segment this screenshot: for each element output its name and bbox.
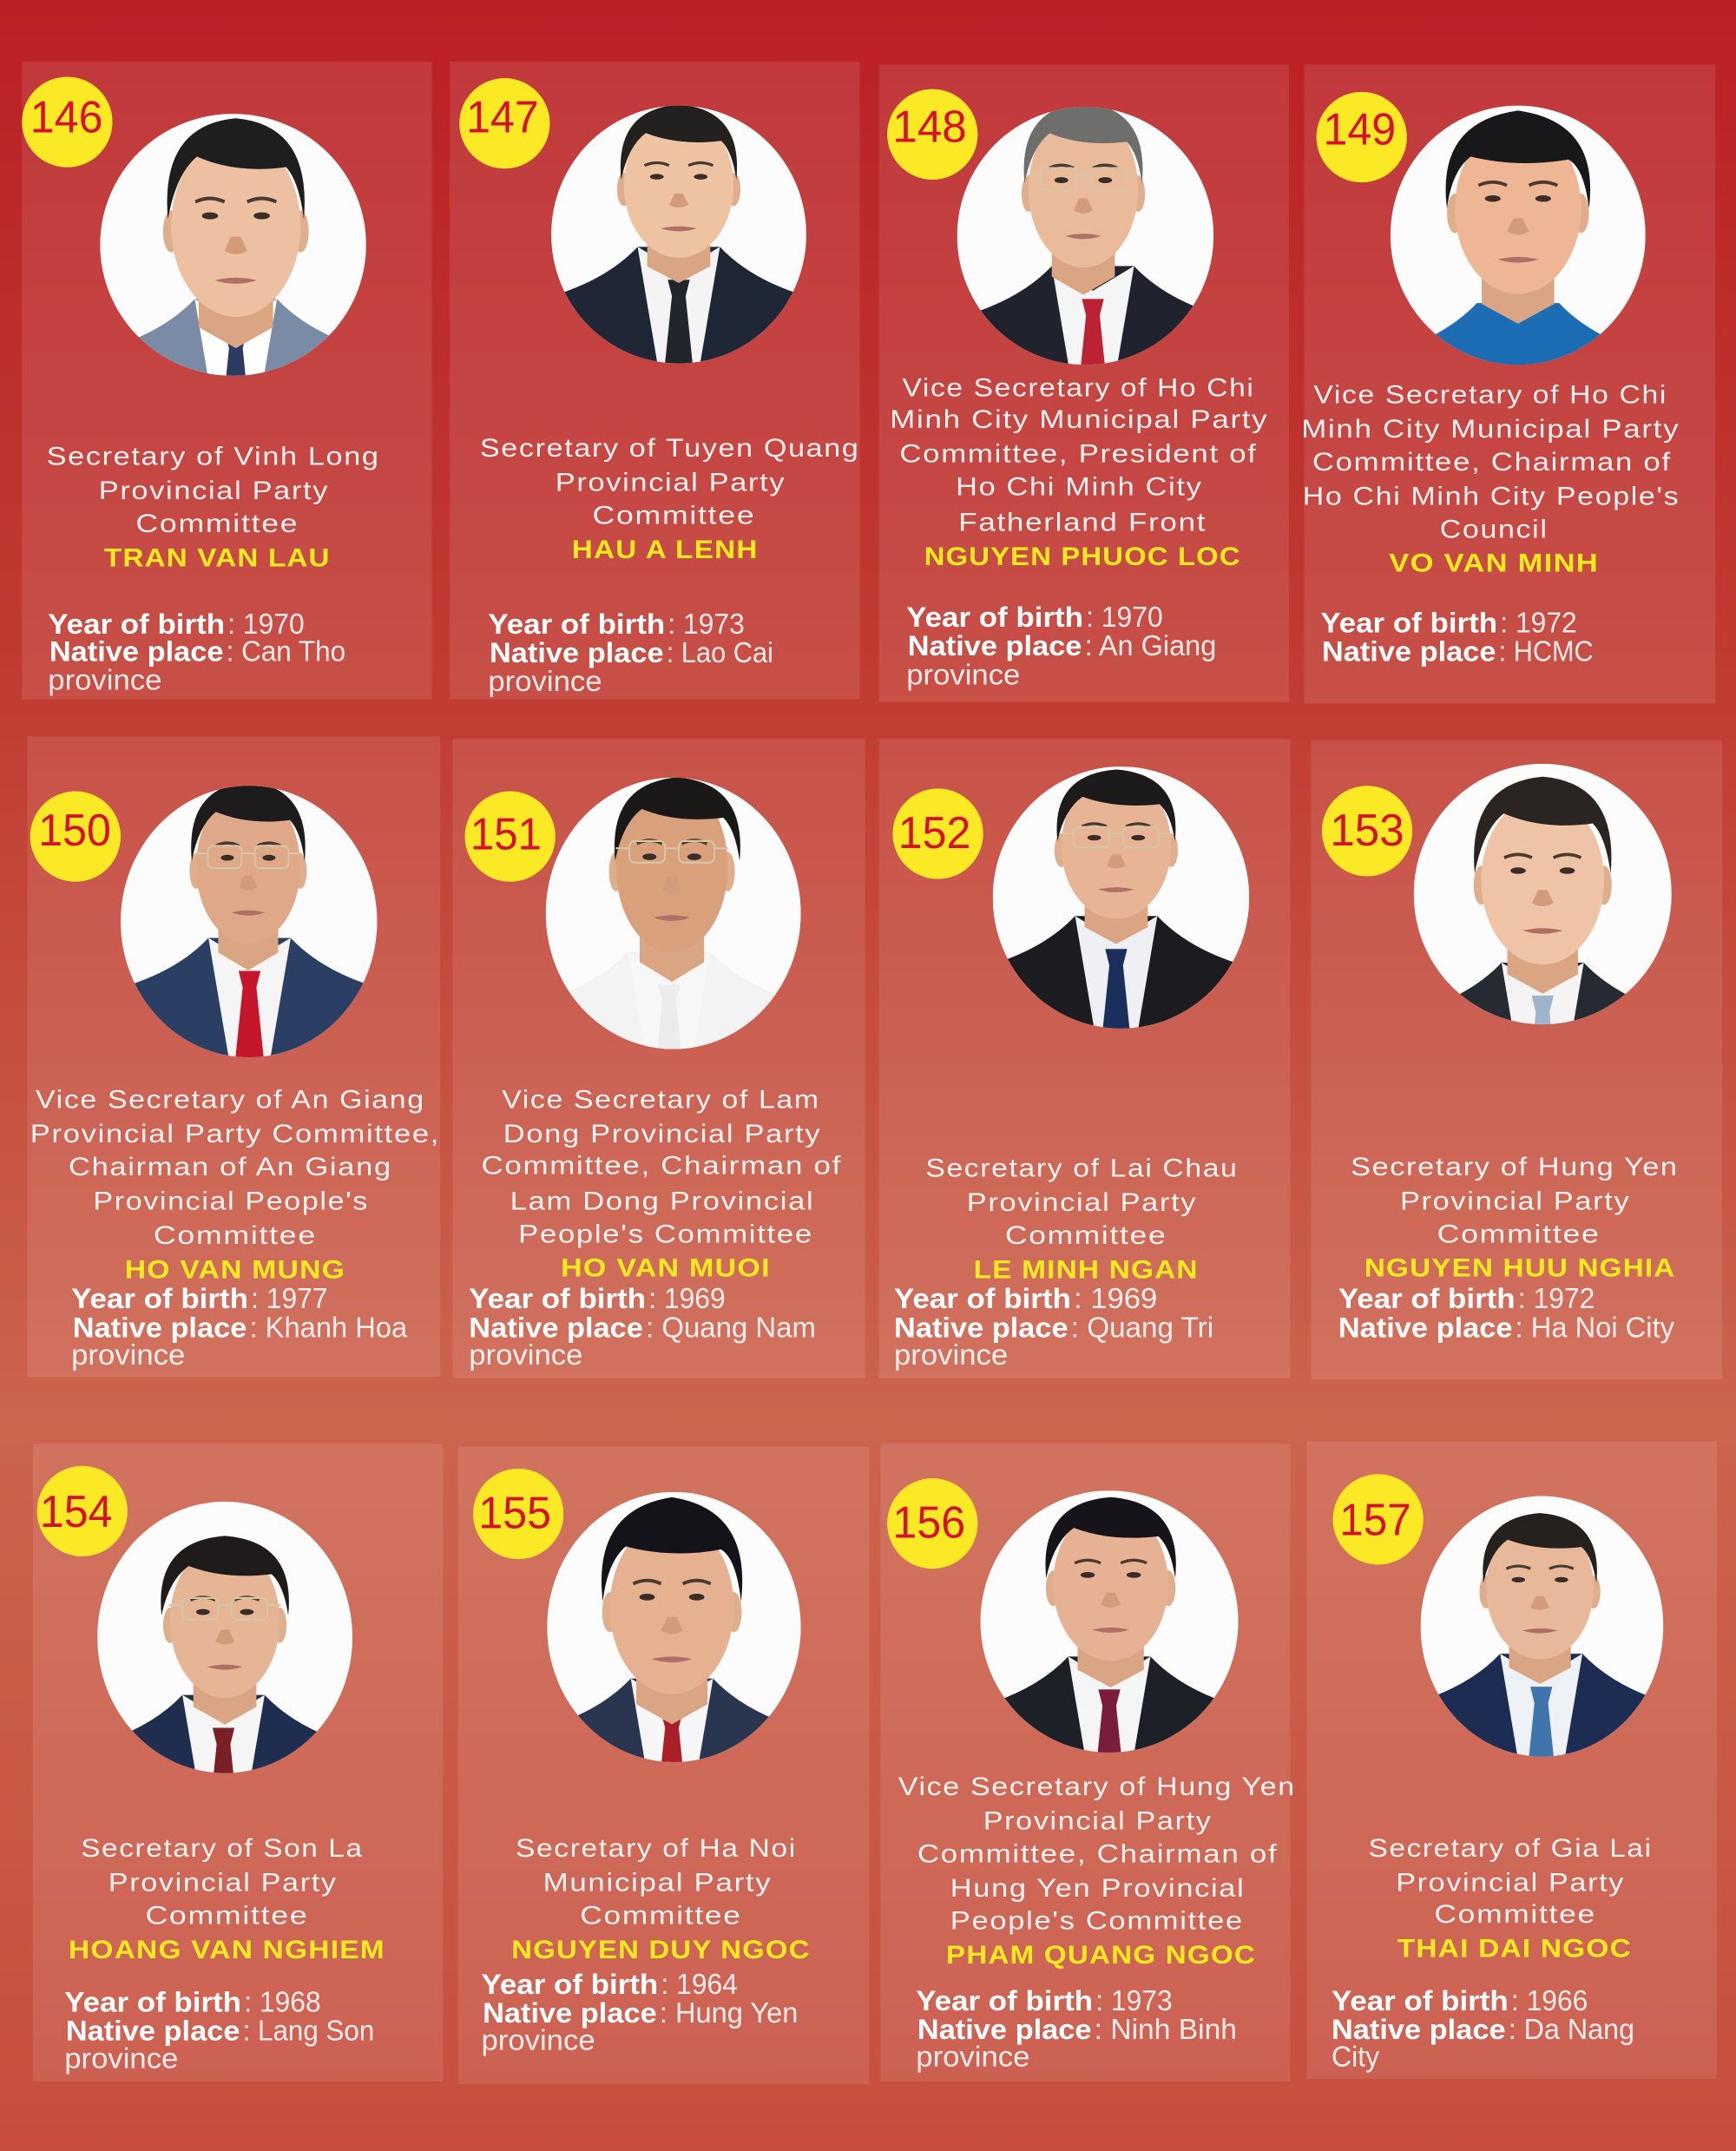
details: Native place [483, 1997, 657, 2029]
number badge: 150 [38, 806, 111, 856]
portrait [981, 1490, 1238, 1753]
details [894, 1283, 1213, 1372]
card 155: Nguyen Duy Ngoc [458, 1447, 870, 2084]
position [47, 444, 380, 538]
card 154: Hoang Van Nghiem [33, 1444, 443, 2082]
details: : 1964 [661, 1969, 738, 2001]
position: Hung Yen Provincial [950, 1875, 1245, 1903]
number badge [892, 788, 983, 879]
panel [880, 1444, 1291, 2082]
number badge [22, 76, 113, 168]
name: NGUYEN PHUOC LOC [924, 543, 1241, 571]
details: : Lang Son [243, 2016, 374, 2048]
details: Year of birth [48, 608, 225, 640]
portrait [121, 786, 377, 1057]
panel [450, 62, 860, 700]
details: : 1972 [1500, 607, 1577, 639]
position: Provincial People's [93, 1187, 369, 1215]
name: HAU A LENH [572, 536, 759, 564]
name: VO VAN MINH [1389, 549, 1599, 578]
details: : Khanh Hoa [250, 1312, 408, 1344]
card 157: Thai Dai Ngoc [1307, 1441, 1720, 2079]
position [890, 375, 1268, 536]
position: Minh City Municipal Party [1301, 416, 1680, 444]
position: Committee [145, 1902, 308, 1930]
number badge [887, 1478, 977, 1569]
position: Provincial Party [983, 1807, 1213, 1835]
details: Year of birth [64, 1986, 241, 2017]
name: TRAN VAN LAU [104, 543, 331, 572]
position: Secretary of Hung Yen [1351, 1154, 1679, 1181]
portrait [993, 766, 1250, 1029]
number badge [465, 792, 556, 882]
details: province [488, 666, 602, 698]
position: People's Committee [518, 1220, 813, 1248]
details [64, 1986, 374, 2075]
details: Year of birth [482, 1969, 658, 2000]
portrait [551, 106, 806, 364]
position [925, 1154, 1239, 1250]
details: province [64, 2042, 178, 2075]
position [81, 1835, 364, 1930]
details: Native place [66, 2016, 240, 2047]
position: Vice Secretary of An Giang [36, 1086, 425, 1114]
name: PHAM QUANG NGOC [946, 1941, 1256, 1970]
card 151: Ho Van Muoi [452, 739, 865, 1378]
details: : Da Nang [1509, 2014, 1634, 2046]
details: province [71, 1339, 185, 1372]
details: Native place [894, 1312, 1069, 1343]
details: : Lao Cai [667, 637, 773, 669]
position [1369, 1835, 1653, 1929]
portrait [1420, 1496, 1663, 1757]
position: Provincial Party [967, 1189, 1197, 1217]
position: Ho Chi Minh City [956, 473, 1202, 501]
position: Secretary of Vinh Long [47, 444, 380, 471]
number badge [37, 1466, 128, 1556]
details: : 1969 [648, 1283, 726, 1315]
details: : Quang Nam [646, 1312, 816, 1344]
number badge [459, 78, 549, 168]
position: Provincial Party [1400, 1187, 1630, 1215]
details: province [48, 665, 161, 697]
position [1351, 1154, 1679, 1248]
card 156: Pham Quang Ngoc [880, 1444, 1296, 2082]
position: Committee [1437, 1220, 1601, 1248]
details: Year of birth [469, 1283, 646, 1314]
position: Municipal Party [543, 1869, 772, 1897]
portrait [957, 107, 1213, 365]
number badge: 146 [30, 92, 102, 142]
number badge: 147 [466, 92, 539, 142]
position [898, 1773, 1296, 1936]
position: Vice Secretary of Ho Chi [902, 375, 1254, 403]
name: NGUYEN HUU NGHIA [1364, 1254, 1675, 1283]
details: Year of birth [916, 1985, 1093, 2016]
position: Chairman of An Giang [69, 1154, 392, 1181]
position: Secretary of Gia Lai [1369, 1835, 1653, 1863]
details: province [894, 1339, 1008, 1372]
panel [452, 739, 865, 1378]
panel [1311, 740, 1722, 1379]
number badge: 155 [478, 1489, 551, 1539]
details [482, 1969, 798, 2057]
position: Ho Chi Minh City People's [1303, 483, 1680, 510]
card 146: Tran Van Lau [22, 62, 432, 700]
name: HOANG VAN NGHIEM [69, 1936, 385, 1964]
position: Committee [580, 1902, 742, 1930]
portrait [545, 778, 800, 1049]
details: Year of birth [1332, 1985, 1509, 2016]
number badge: 149 [1323, 105, 1396, 155]
details: : An Giang [1085, 630, 1216, 662]
panel [1307, 1441, 1717, 2079]
details: province [469, 1339, 582, 1372]
details: Year of birth [1338, 1283, 1516, 1314]
position: People's Committee [950, 1908, 1244, 1936]
details: province [916, 2042, 1029, 2074]
position: Lam Dong Provincial [510, 1187, 814, 1215]
name: NGUYEN DUY NGOC [511, 1936, 811, 1964]
panel [28, 736, 440, 1377]
portrait [1391, 106, 1646, 365]
position [1301, 381, 1680, 543]
details: : Hung Yen [660, 1997, 798, 2029]
panel [879, 739, 1291, 1378]
details [48, 608, 345, 697]
portrait [100, 114, 366, 376]
card 148: Nguyen Phuoc Loc [879, 64, 1289, 702]
position: Provincial Party [1396, 1869, 1625, 1897]
details: : Ninh Binh [1095, 2014, 1237, 2046]
position: Secretary of Tuyen Quang [480, 435, 860, 463]
details: : 1973 [1095, 1985, 1173, 2017]
position: Committee, President of [899, 440, 1258, 468]
number badge: 154 [40, 1487, 113, 1537]
position: Committee [154, 1222, 317, 1250]
number badge [887, 89, 977, 180]
position: Dong Provincial Party [503, 1121, 821, 1148]
details: : 1970 [227, 608, 305, 641]
position: Vice Secretary of Hung Yen [898, 1773, 1296, 1801]
position: Committee [592, 502, 755, 530]
number badge: 151 [470, 810, 542, 860]
position [516, 1835, 797, 1930]
details: province [482, 2025, 595, 2057]
panel [22, 62, 432, 700]
details [488, 608, 773, 698]
position: Vice Secretary of Ho Chi [1313, 381, 1667, 409]
details [1332, 1985, 1634, 2074]
details [1320, 607, 1594, 668]
number badge [30, 792, 121, 882]
details: : Ha Noi City [1516, 1312, 1674, 1344]
details [906, 602, 1216, 691]
details: Native place [1322, 635, 1496, 667]
number badge [1322, 786, 1412, 876]
position: Fatherland Front [958, 509, 1207, 536]
details: Native place [917, 2014, 1092, 2045]
name: THAI DAI NGOC [1397, 1934, 1632, 1963]
details: : 1968 [244, 1986, 321, 2018]
details: Year of birth [894, 1283, 1071, 1314]
position: Committee [135, 510, 299, 538]
position: Committee, Chairman of [1312, 449, 1672, 477]
details: Native place [1332, 2014, 1506, 2045]
position: Provincial Party [556, 470, 786, 497]
name: LE MINH NGAN [974, 1255, 1199, 1284]
position: Minh City Municipal Party [890, 406, 1268, 434]
position [480, 435, 860, 530]
panel [458, 1447, 870, 2084]
position: Council [1440, 516, 1549, 543]
details [71, 1283, 408, 1372]
card 150: Ho Van Mung [28, 736, 440, 1377]
card 149: Vo Van Minh [1301, 64, 1715, 703]
portrait [1413, 764, 1672, 1024]
card 153: Nguyen Huu Nghia [1311, 740, 1722, 1379]
card 152: Le Minh Ngan [879, 739, 1294, 1378]
position: Committee [1434, 1901, 1596, 1929]
position: Provincial Party [108, 1869, 338, 1897]
details: Year of birth [906, 602, 1083, 633]
details [469, 1283, 816, 1372]
details: : 1969 [1074, 1283, 1157, 1315]
position: Committee, Chairman of [482, 1152, 842, 1180]
details: Native place [469, 1312, 643, 1343]
details: : Quang Tri [1071, 1312, 1213, 1344]
name: HO VAN MUOI [561, 1254, 771, 1283]
number badge: 157 [1339, 1496, 1411, 1546]
position: Secretary of Lai Chau [925, 1154, 1239, 1182]
position: Committee, Chairman of [917, 1840, 1278, 1868]
portrait [547, 1491, 800, 1762]
details [1338, 1283, 1674, 1344]
details: : 1977 [251, 1283, 328, 1315]
details: Native place [73, 1312, 247, 1343]
details [916, 1985, 1237, 2074]
position: Committee [1005, 1222, 1167, 1250]
details: : HCMC [1499, 635, 1594, 668]
card 147: Hau A Lenh [450, 62, 860, 700]
details: province [906, 659, 1020, 691]
details: : 1972 [1518, 1283, 1595, 1315]
portrait [97, 1502, 352, 1773]
position: Secretary of Son La [81, 1835, 364, 1863]
name: HO VAN MUNG [125, 1255, 345, 1284]
position: Provincial Party Committee, [30, 1121, 440, 1148]
panel [1304, 64, 1715, 703]
number badge [1333, 1474, 1424, 1564]
details: Native place [1338, 1312, 1512, 1343]
number badge: 148 [892, 102, 967, 153]
number badge: 153 [1330, 806, 1404, 856]
position: Vice Secretary of Lam [502, 1086, 820, 1114]
details: : 1970 [1086, 602, 1163, 634]
details: Year of birth [1320, 607, 1497, 638]
details: : 1966 [1511, 1985, 1588, 2017]
details: Native place [490, 637, 664, 668]
details: Native place [908, 630, 1082, 661]
panel [33, 1444, 443, 2082]
number badge: 152 [898, 808, 970, 858]
number badge [473, 1469, 563, 1559]
position [30, 1086, 440, 1250]
panel [879, 64, 1289, 702]
details: Year of birth [488, 608, 665, 640]
number badge: 156 [892, 1498, 965, 1549]
details: City [1332, 2042, 1380, 2074]
details: Year of birth [71, 1283, 248, 1314]
details: : Can Tho [227, 635, 345, 668]
position [482, 1086, 842, 1248]
position: Secretary of Ha Noi [516, 1835, 797, 1863]
details: : 1973 [667, 608, 745, 641]
number badge [1317, 92, 1407, 182]
details: Native place [49, 635, 224, 667]
position: Provincial Party [99, 477, 329, 505]
